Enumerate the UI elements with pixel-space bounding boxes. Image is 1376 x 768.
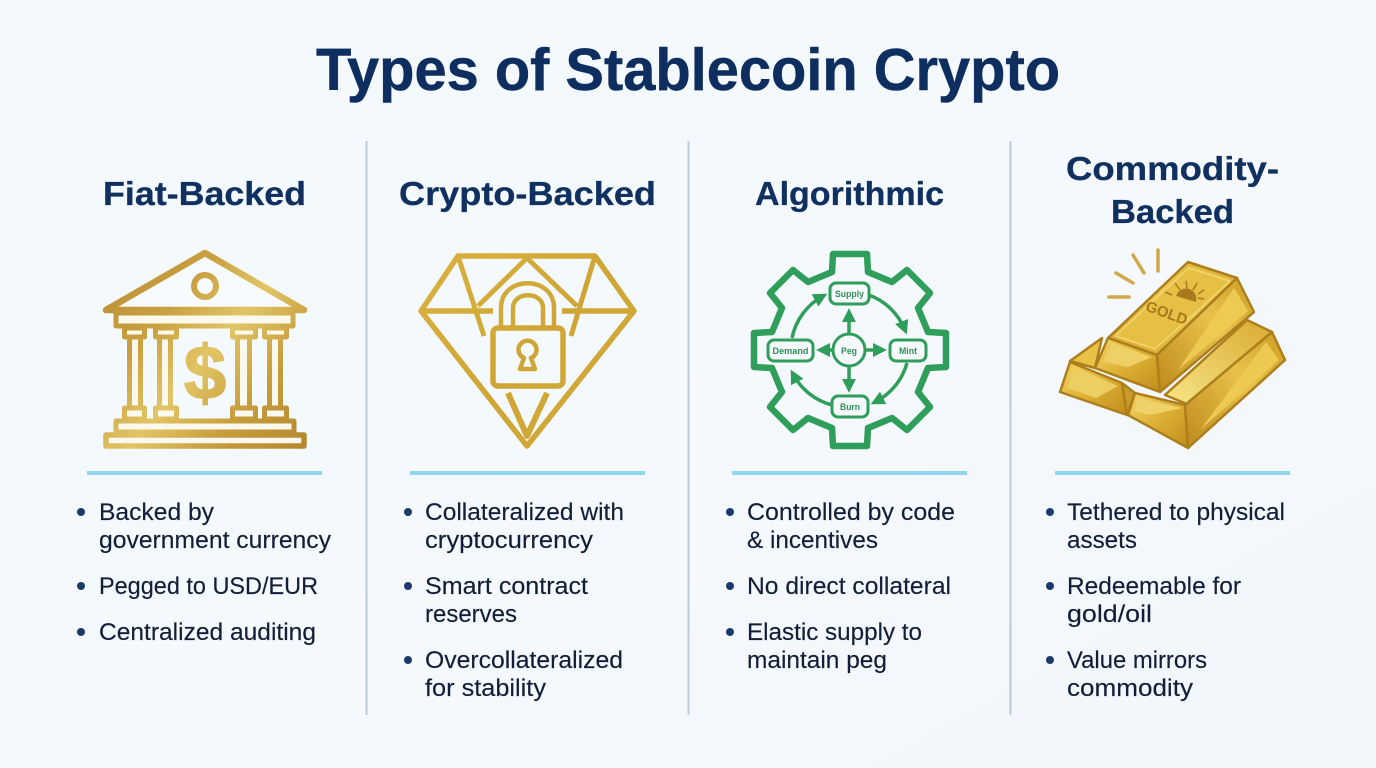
icon: gear with peg cycle: Supply	[835, 289, 865, 300]
heading: fiat-backed: Fiat-Backed	[103, 175, 306, 212]
icon: gold bars: GOLD	[1143, 298, 1190, 329]
bullet list: crypto-backed: Overcollateralized	[425, 647, 623, 674]
icon: gear with peg cycle: Mint	[899, 346, 918, 357]
icon: gold bars	[1060, 250, 1285, 448]
icon: gear with peg cycle: Burn	[840, 402, 860, 413]
icon: diamond with padlock	[421, 256, 634, 446]
bullet list: algorithmic: & incentives	[747, 527, 878, 554]
bullet list: commodity-backed: Tethered to physical	[1067, 499, 1285, 526]
bullet list: fiat-backed: Backed by	[99, 499, 214, 526]
bullet list: fiat-backed: Pegged to USD/EUR	[99, 573, 318, 600]
heading: algorithmic: Algorithmic	[755, 175, 944, 212]
heading: commodity-backed: Backed	[1111, 193, 1234, 230]
bullet list: algorithmic: No direct collateral	[747, 573, 951, 600]
bullet list: commodity-backed	[1046, 499, 1285, 702]
bullet list: crypto-backed	[404, 499, 624, 702]
bullet list: fiat-backed: government currency	[99, 527, 331, 554]
bullet list: crypto-backed: Collateralized with	[425, 499, 624, 526]
bullet list: commodity-backed: Value mirrors	[1067, 647, 1207, 674]
bullet list: commodity-backed: commodity	[1067, 675, 1193, 702]
panel: crypto-backed	[399, 175, 656, 702]
title: Types of Stablecoin Crypto	[316, 37, 1060, 103]
panel: fiat-backed	[77, 175, 331, 646]
heading: commodity-backed: Commodity-	[1066, 150, 1279, 187]
heading: commodity-backed	[1066, 150, 1279, 230]
bullet list: algorithmic: Elastic supply to	[747, 619, 922, 646]
bullet list: algorithmic: maintain peg	[747, 647, 887, 674]
heading: crypto-backed: Crypto-Backed	[399, 175, 656, 212]
bullet list: commodity-backed: Redeemable for	[1067, 573, 1241, 600]
icon: gear with peg cycle: Peg	[841, 346, 857, 357]
bullet list: crypto-backed: for stability	[425, 675, 546, 702]
bullet list: fiat-backed	[77, 499, 331, 646]
icon: bank with dollar sign	[106, 253, 304, 446]
bullet list: commodity-backed: gold/oil	[1067, 601, 1152, 628]
bullet list: algorithmic: Controlled by code	[747, 499, 955, 526]
panel: commodity-backed	[1046, 150, 1290, 702]
bullet list: commodity-backed: assets	[1067, 527, 1137, 554]
panel: algorithmic	[726, 175, 967, 674]
bullet list: crypto-backed: cryptocurrency	[425, 527, 593, 554]
bullet list: crypto-backed: Smart contract	[425, 573, 588, 600]
icon: bank with dollar sign: $	[184, 331, 226, 416]
bullet list: algorithmic	[726, 499, 955, 674]
bullet list: crypto-backed: reserves	[425, 601, 517, 628]
bullet list: fiat-backed: Centralized auditing	[99, 619, 316, 646]
icon: gear with peg cycle: Demand	[772, 346, 809, 357]
icon: gear with peg cycle	[754, 254, 946, 446]
